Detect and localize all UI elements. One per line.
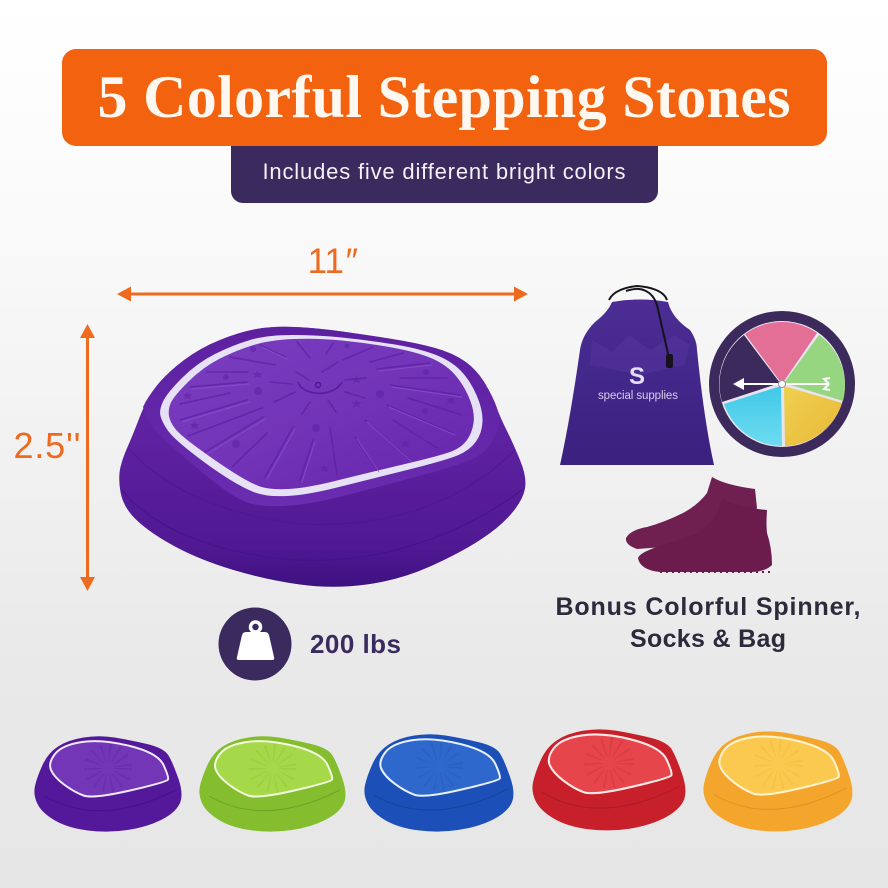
small stone: green bbox=[199, 736, 345, 832]
bag logo: S bbox=[629, 363, 645, 390]
width dimension: 11″ bbox=[308, 242, 358, 281]
weight label: 200 lbs bbox=[310, 629, 401, 659]
grip socks bbox=[626, 477, 772, 572]
title banner: 5 Colorful Stepping Stones bbox=[98, 64, 790, 130]
title banner bbox=[62, 49, 827, 146]
bonus caption bbox=[556, 593, 860, 653]
height dimension: 2.5'' bbox=[14, 425, 80, 466]
bonus caption: Bonus Colorful Spinner, bbox=[556, 593, 860, 621]
lower step lines bbox=[122, 490, 522, 560]
small stone: blue bbox=[364, 734, 513, 832]
height dimension bbox=[14, 324, 95, 591]
spinner segments bbox=[745, 322, 817, 384]
weight capacity icon bbox=[218, 608, 292, 680]
embossed rays bbox=[180, 342, 462, 480]
drawstring bag bbox=[560, 286, 714, 465]
embossed stars and dots bbox=[183, 344, 455, 472]
rim bbox=[143, 327, 500, 506]
main purple stepping stone bbox=[119, 327, 525, 587]
spinner arrow bbox=[733, 378, 829, 390]
subtitle banner bbox=[231, 140, 658, 203]
small stone: red bbox=[532, 729, 685, 830]
bag brand: special supplies bbox=[598, 390, 678, 402]
small stone: purple bbox=[34, 736, 182, 832]
embossed ray highlights bbox=[182, 347, 462, 482]
small stone: yellow bbox=[703, 731, 852, 831]
width dimension bbox=[117, 242, 528, 302]
bag cord bbox=[609, 286, 669, 358]
center boss bbox=[298, 382, 342, 393]
white ring bbox=[160, 335, 483, 496]
stone body bbox=[119, 327, 525, 587]
spinner bbox=[709, 311, 855, 457]
subtitle banner: Includes five different bright colors bbox=[262, 159, 626, 184]
top surface bbox=[169, 339, 474, 489]
bonus caption: Socks & Bag bbox=[630, 625, 786, 653]
